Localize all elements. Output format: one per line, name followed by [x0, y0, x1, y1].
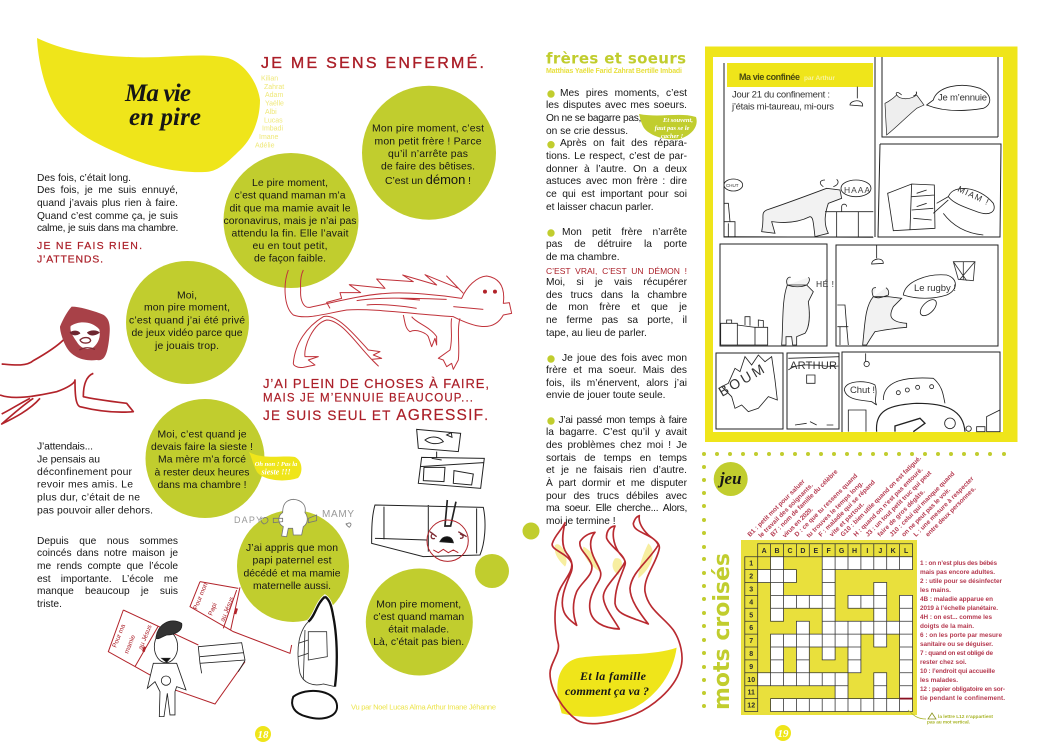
contributor names: Imane	[259, 134, 279, 141]
text block: j'attendais: plus dur, c’était de ne	[37, 492, 140, 504]
text block: jouer toute seule	[546, 352, 687, 404]
credits: vu par: Vu par Noel Lucas Alma Arthur Imane Jéhanne	[351, 702, 496, 712]
text block: la bagarre: moi je termine !	[546, 516, 616, 527]
comic speech texts: HÉ !	[816, 279, 834, 289]
badge: jeu: jeu	[717, 469, 742, 488]
crossword vertical clues: on ne peut pas le voir.	[900, 487, 952, 538]
handwritten text on red letters	[111, 582, 236, 655]
circle: maman malade: c’est quand maman	[373, 612, 464, 623]
circle: la sieste: Moi, c’est quand je	[158, 430, 247, 440]
comic panel outlines	[716, 57, 1001, 432]
text block: la bagarre: des problèmes chez moi ! Je	[546, 440, 687, 451]
crossword vertical clues: le travail des soignants.	[757, 482, 815, 539]
contributor names	[255, 76, 284, 150]
crossword vertical clues: F : maladie qui se répand	[817, 479, 877, 538]
contributor names: Yaëlle	[265, 100, 284, 108]
contributor names: Imbadi	[262, 126, 283, 132]
crossword horizontal clues: 6 : on les porte par mesure	[920, 632, 1002, 639]
comic art text: boum: BOUM	[716, 361, 767, 400]
speech bubble: et souvent: Et souvent,	[662, 117, 693, 124]
circle: la mamie et le coronavirus: attendu la fin. Elle l’avait	[232, 228, 349, 240]
crossword vertical clues: vite et partout.	[828, 501, 866, 538]
crossword horizontal clues: rester chez soi.	[920, 659, 967, 666]
text block: jouer toute seule: frère et ma soeur. Mais des	[546, 365, 687, 376]
circle: mon petit frère	[362, 86, 496, 220]
intro text block: Des fois, je me suis ennuyé,	[37, 185, 178, 196]
circle: jeux vidéo: Moi,	[177, 290, 197, 302]
text block: porte de la chambre	[546, 227, 687, 343]
crossword grid: E	[813, 548, 818, 555]
note: lettre L12 with arrow	[908, 710, 993, 726]
handwritten red note: plein de choses à faire: MAIS JE M’ENNUIE BEAUCOUP...	[263, 392, 473, 404]
badge: jeu	[714, 462, 748, 496]
crossword grid: 11	[747, 690, 755, 697]
circle: la mamie et le coronavirus: eu en tout petit,	[252, 241, 328, 252]
circle: la sieste: à rester deux heures	[154, 468, 250, 478]
crossword vertical clues: J10 : celui qui manque quand	[888, 470, 956, 538]
comic title band: Ma vie confinée	[739, 72, 800, 82]
comic speech texts	[726, 92, 990, 396]
comic speech texts: MIAM !	[956, 184, 990, 207]
circle: jeux vidéo	[126, 261, 249, 384]
circle: la sieste: dans ma chambre !	[158, 480, 246, 491]
crossword grid: B	[774, 548, 780, 555]
speech bubble: et souvent: cacher !	[661, 133, 684, 140]
crossword horizontal clues: mais pas encore adultes.	[920, 569, 995, 576]
caption: et la famille	[565, 669, 649, 698]
crossword grid: 9	[749, 664, 753, 671]
circle: mon petit frère: mon petit frère ! Parce	[374, 136, 482, 148]
text block: la bagarre: et je ne faisais rien d’autre.	[546, 465, 687, 476]
crossword grid: A	[762, 548, 767, 555]
drawing: couch with crying child	[372, 500, 485, 561]
circle: mon petit frère: Mon pire moment, c’est	[372, 124, 484, 134]
comic drawings: lower rows	[721, 245, 1000, 432]
text block: porte de la chambre: des trucs dans la chambre	[546, 290, 687, 301]
circle: maman malade: était malade.	[388, 624, 449, 636]
crossword grid	[741, 540, 917, 715]
drawing: child with red letters for grandparents	[108, 582, 292, 717]
speech bubble: et souvent: faut pas se le	[655, 125, 690, 132]
comic title band: par Arthur	[804, 75, 835, 82]
comic caption: j’étais mi-taureau, mi-ours	[731, 102, 834, 112]
text block: disputes: On ne se bagarre pas,	[546, 113, 641, 124]
drawing: red iguana creature	[285, 270, 512, 369]
text block: l'école: manque beaucoup je suis	[37, 586, 178, 597]
crossword grid: 7	[749, 638, 753, 645]
crossword vertical clues: H : quand on n’est pas entouré.	[852, 466, 925, 538]
text block: j'attendais: J’attendais...	[37, 442, 93, 452]
text block: la bagarre: la bagarre. C’est qu’il y avait	[546, 427, 687, 438]
drawing: red flames with yellow blob	[550, 516, 682, 724]
vertical heading: mots croisés: mots croisés	[710, 553, 735, 710]
crossword horizontal clues: 4B : maladie apparue en	[920, 596, 993, 603]
crossword grid: 1	[749, 561, 753, 568]
handwritten red note: plein de choses à faire: JE SUIS SEUL ET AGRESSIF.	[263, 407, 488, 424]
text block: j'attendais: déconfinement pour	[37, 467, 133, 478]
handwritten text on red letters: au Jésus	[219, 595, 236, 623]
comic speech texts: Le rugby !	[914, 283, 956, 294]
circle: papi et mamie décédés: décédé et ma mamie	[244, 568, 341, 580]
drawing: black bag shape	[292, 597, 337, 719]
note: lettre L12 with arrow: pas au mot vertical.	[927, 720, 970, 726]
comic speech texts: HAAA	[844, 185, 870, 195]
handwritten red note: plein de choses à faire: J’AI PLEIN DE CHOSES À FAIRE,	[263, 376, 489, 391]
crossword vertical clues: B1 : petit mot pour saluer	[746, 478, 807, 538]
crossword horizontal clues: sanitaire ou se déguiser.	[920, 641, 993, 648]
crossword horizontal clues: 7 : quand on est obligé de	[920, 650, 993, 657]
handwritten heading: je me sens enfermé: JE ME SENS ENFERMÉ.	[261, 53, 484, 72]
circle: la mamie et le coronavirus: de façon faible.	[254, 254, 326, 264]
circle: papi et mamie décédés: papi paternel est	[252, 556, 332, 566]
text block: porte de la chambre: de ma chambre.	[546, 252, 620, 263]
text block: jouer toute seule: envie de jouer toute seule.	[546, 390, 666, 401]
crossword grid: 12	[747, 703, 755, 710]
speech bubble: oh non la sieste: Oh non ! Pas la	[255, 461, 298, 468]
comic drawings: upper row	[724, 85, 994, 237]
crossword grid: F	[827, 548, 832, 555]
speech bubble: oh non la sieste	[249, 452, 301, 480]
crossword grid: J	[878, 548, 882, 555]
crossword horizontal clues	[920, 560, 1005, 702]
crossword vertical clues: B7 : nom de famille du célèbre	[769, 468, 840, 538]
circle: papi et mamie décédés: maternelle aussi.	[253, 581, 331, 592]
crossword vertical clues: G10 : bien utile quand on est fatigué.	[839, 455, 923, 538]
crossword horizontal clues: doigts de la main.	[920, 623, 974, 630]
crossword grid: 8	[749, 651, 753, 658]
contributor names: Kilian	[261, 76, 278, 82]
text block: porte de la chambre: C’EST VRAI, C’EST UN DÉMON !	[546, 266, 687, 276]
text block: disputes: tions. Le respect, c’est de par-	[546, 151, 687, 162]
text block: la bagarre: sortais de temps en temps	[546, 453, 687, 464]
handwritten red note: je ne fais rien	[37, 240, 142, 266]
crossword vertical clues: D : ce que tu ressens quand	[793, 473, 859, 538]
crossword horizontal clues: les malades.	[920, 677, 958, 684]
text block: disputes: Mes pires moments, c’est	[560, 88, 687, 99]
text block: disputes: on se crie dessus.	[546, 126, 628, 137]
crossword grid: K	[891, 548, 896, 555]
text block: disputes: Après on fait des répara-	[560, 138, 687, 149]
crossword horizontal clues: 2019 à l’échelle planétaire.	[920, 605, 998, 612]
circle: papi et mamie décédés	[237, 510, 349, 622]
handwritten text on red letters: au Jésus	[137, 623, 154, 651]
title blob: Ma vie en pire: Ma vie	[124, 80, 191, 107]
crossword grid: I	[866, 548, 868, 555]
comic caption	[731, 90, 834, 112]
comic speech texts: Chut !	[850, 385, 875, 396]
text block: jouer toute seule: Je joue des fois avec mon	[562, 352, 687, 364]
crossword grid: 5	[749, 612, 753, 619]
text block: disputes: et laisser chacun parler.	[546, 202, 654, 213]
comic art text: arthur door sign: ARTHUR	[790, 360, 837, 372]
title blob: Ma vie en pire	[37, 38, 260, 172]
page number 18	[255, 726, 271, 742]
text block: j'attendais: revoir mes amis. Le	[37, 480, 133, 490]
circle: maman malade	[366, 568, 473, 676]
crossword horizontal clues: tie pendant le confinement.	[920, 695, 1005, 702]
contributor names: Adam	[265, 92, 283, 99]
page number 18: 18	[258, 729, 269, 741]
text block: porte de la chambre: Moi, si je vais récupérer	[546, 277, 687, 288]
crossword horizontal clues: 12 : papier obligatoire en sor-	[920, 686, 1005, 693]
page number 19	[775, 725, 791, 741]
text block: l'école	[37, 536, 178, 614]
text block: disputes: astuces avec mon frère : dire	[546, 176, 687, 187]
crossword vertical clues: tu trouves le temps long.	[805, 480, 865, 539]
intro text block: quand j’avais plus rien à faire.	[37, 198, 178, 209]
crossword vertical clues: faire de gros dégâts.	[876, 488, 927, 538]
text block: j'attendais: pas pouvoir aller dehors.	[37, 506, 153, 516]
crossword horizontal clues: 2 : utile pour se désinfecter	[920, 578, 1002, 585]
handwritten text on red letters: Pour mon	[192, 582, 210, 611]
circle: la sieste: devais faire la sieste !	[151, 442, 253, 453]
intro text block: Quand c’est comme ça, je suis	[37, 211, 178, 222]
comic frame	[705, 46, 1018, 442]
text block: j'attendais: Je pensais au	[37, 454, 100, 466]
crossword grid: 4	[749, 599, 753, 606]
circle: jeux vidéo: de jeux vidéo parce que	[132, 328, 243, 339]
crossword horizontal clues: les mains.	[920, 587, 951, 594]
circle: mon petit frère: de faire des bêtises.	[381, 162, 475, 172]
crossword grid: G	[839, 548, 845, 555]
intro text block	[37, 173, 178, 237]
caption: et la famille: comment ça va ?	[565, 684, 649, 698]
text block: l'école: est importante. L’école me	[37, 574, 178, 585]
intro text block: calme, je suis dans ma chambre.	[37, 223, 178, 234]
speech bubble: oh non la sieste: sieste !!!	[260, 468, 291, 476]
crossword grid: 2	[749, 574, 753, 581]
intro text block: Des fois, c’était long.	[37, 173, 131, 184]
crossword grid: C	[787, 548, 793, 555]
heading: frères et soeurs: frères et soeurs	[546, 50, 686, 68]
text block: porte de la chambre: ne ferme pas sa porte, il	[546, 315, 687, 326]
text block: porte de la chambre: de mon frère et que je	[546, 302, 687, 313]
handwritten red note: je ne fais rien: JE NE FAIS RIEN.	[37, 240, 142, 252]
handwritten text on red letters: Papi	[207, 602, 219, 617]
text block: la bagarre: pour des trucs débiles avec	[546, 491, 687, 502]
note: lettre L12 with arrow: la lettre L12 n’appartient	[938, 714, 993, 720]
crossword grid: D	[800, 548, 805, 555]
text block: jouer toute seule: fois, ils m’énervent, alors j’ai	[546, 378, 687, 389]
heading: frères et soeurs: Matthias Yaëlle Farid Zahrat Bertille Imbadi	[546, 68, 682, 75]
text block: l'école: triste.	[37, 599, 62, 610]
circle: jeux vidéo: je jouais trop.	[154, 341, 219, 352]
text block: disputes: donner à l’autre. On a deux	[546, 164, 687, 175]
text block: disputes	[546, 88, 687, 216]
comic caption: Jour 21 du confinement :	[732, 90, 830, 100]
circle: la mamie et le coronavirus: Le pire moment,	[252, 178, 328, 189]
comic title band	[727, 63, 873, 87]
caption: et la famille: Et la famille	[579, 669, 647, 683]
text block: la bagarre: À part dormir et me disputer	[546, 478, 687, 489]
text block: disputes: les disputes avec mes soeurs.	[546, 100, 687, 111]
text block: la bagarre: J’ai passé mon temps à faire	[558, 415, 687, 426]
text block: la bagarre: ma soeur. Elle cherche... Alors,	[546, 503, 687, 514]
crossword horizontal clues: 4H : on est... comme les	[920, 614, 992, 621]
comic speech texts: CHUT	[726, 183, 739, 188]
contributor names: Zahrat	[264, 84, 284, 91]
handwritten red note: plein de choses à faire	[263, 376, 489, 424]
circle: la sieste	[146, 399, 264, 518]
drawing: television set	[417, 429, 484, 488]
crossword vertical clues: virus en 2020.	[781, 506, 815, 539]
dot: small green circle	[475, 554, 509, 588]
dot: left of flames	[522, 522, 540, 540]
page number 19: 19	[778, 728, 789, 740]
crossword vertical clues: J3 : un tout petit truc qui peut	[864, 469, 934, 538]
drawing: dapy and mamy figure: DAPY	[234, 515, 262, 525]
crossword grid: H	[852, 548, 857, 555]
contributor names: Lucas	[264, 118, 283, 124]
drawing: dapy and mamy figure: MAMY	[322, 509, 354, 520]
text block: porte de la chambre: pas de détruire la porte	[546, 239, 687, 250]
speech bubble: et souvent	[639, 114, 697, 140]
crossword grid: 10	[747, 677, 755, 684]
crossword grid: 3	[749, 586, 753, 594]
crossword grid: L	[904, 548, 909, 555]
circle: maman malade: Mon pire moment,	[376, 600, 461, 610]
text block: porte de la chambre: tape, au lieu de parler.	[546, 328, 647, 339]
drawing: red lion	[0, 307, 133, 424]
comic speech texts: Je m’ennuie	[938, 92, 987, 104]
crossword vertical clues: L : une mesure à respecter	[912, 475, 976, 538]
circle: maman malade: Là, c’était pas bien.	[373, 637, 464, 648]
drawing: dapy and mamy figure	[234, 499, 354, 537]
text block: l'école: Depuis que nous sommes	[37, 536, 178, 547]
text block: disputes: ce qui est important pour soi	[546, 189, 687, 200]
text block: la bagarre	[546, 415, 687, 531]
title blob: Ma vie en pire: en pire	[129, 104, 201, 131]
contributor names: Albi	[265, 109, 277, 116]
circle: jeux vidéo: mon pire moment,	[144, 302, 230, 314]
circle: la mamie et le coronavirus: coronavirus, mais je n’ai pas	[224, 216, 356, 227]
crossword vertical clues	[746, 455, 978, 539]
circle: jeux vidéo: c’est quand j’ai été privé	[129, 316, 245, 326]
crossword horizontal clues: 1 : on n’est plus des bébés	[920, 560, 997, 567]
circle: la sieste: Ma mère m’a forcé	[158, 454, 246, 466]
decorative dots	[702, 452, 1006, 708]
crossword horizontal clues: 10 : l’endroit qui accueille	[920, 668, 995, 675]
circle: la mamie et le coronavirus	[224, 153, 358, 288]
circle: la mamie et le coronavirus: dit que ma mamie avait le	[230, 204, 351, 214]
crossword grid: 6	[749, 625, 753, 632]
text block: j'attendais	[37, 442, 153, 516]
circle: mon petit frère: C’est un démon !	[385, 172, 471, 187]
handwritten text on red letters: Pour ma	[111, 623, 127, 649]
circle: papi et mamie décédés: J’ai appris que mon	[246, 543, 338, 554]
text block: l'école: me rends compte que l’école	[37, 561, 178, 572]
handwritten red note: je ne fais rien: J’ATTENDS.	[37, 254, 103, 266]
circle: mon petit frère: qu’il n’arrête pas	[388, 149, 468, 160]
contributor names: Adélie	[255, 142, 275, 150]
text block: l'école: coincés dans notre maison je	[37, 548, 178, 559]
handwritten text on red letters: mamie	[123, 634, 137, 655]
crossword vertical clues: entre deux personnes.	[924, 485, 978, 538]
text block: porte de la chambre: Mon petit frère n’arrête	[562, 227, 687, 238]
circle: la mamie et le coronavirus: c’est quand maman m’a	[234, 190, 346, 202]
